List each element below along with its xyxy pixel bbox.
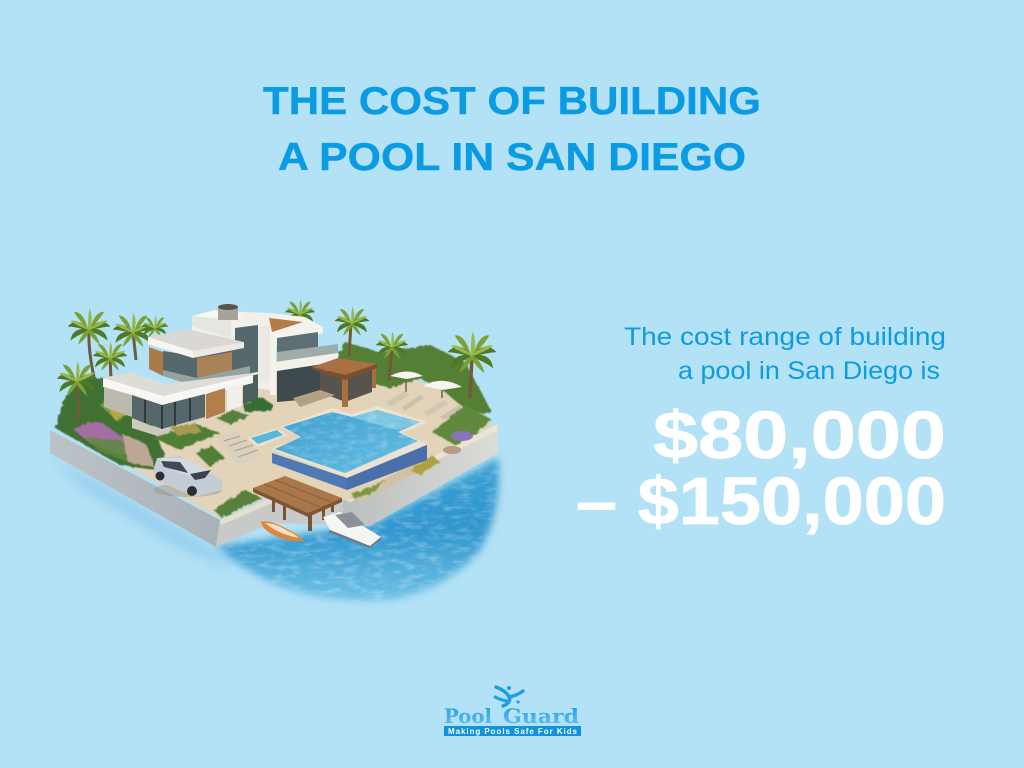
logo tagline banner: Making Pools Safe For Kids [448,727,578,736]
illustration: isometric pool villa [50,299,499,601]
text: price range: $80,000 [653,398,946,473]
car [153,456,222,497]
stairs [217,432,262,467]
umbrellas and loungers [386,372,464,420]
palm trees [57,299,496,421]
text: cost range intro: The cost range of building [624,323,946,351]
ground floor [103,372,253,398]
title: A POOL IN SAN DIEGO [278,136,746,179]
water [216,458,499,601]
motorboat [323,512,381,548]
title [263,80,761,179]
text: cost range intro: a pool in San Diego is [678,357,940,385]
logo: Pool Guard [444,686,581,736]
logo wordmark: Pool [444,704,492,728]
spa [247,428,288,447]
back foliage [330,342,492,415]
wall shadow on the left [50,455,235,570]
icon: water splash figure [495,686,523,706]
logo wordmark: Guard [503,704,579,728]
deck surface [60,350,492,518]
text: price range [576,398,946,539]
villa [103,304,338,440]
right planter [350,405,492,503]
swimming pool [270,406,428,490]
text: cost range intro [624,323,946,385]
dock [253,476,342,531]
text: price range: – $150,000 [576,464,946,539]
left garden [55,377,165,470]
title: THE COST OF BUILDING [263,80,761,123]
platform walls [50,424,498,547]
pergola [293,358,377,407]
kayak [261,521,304,541]
logo wordmark [444,704,579,728]
upper floor [149,347,163,376]
garden beds [153,397,273,518]
